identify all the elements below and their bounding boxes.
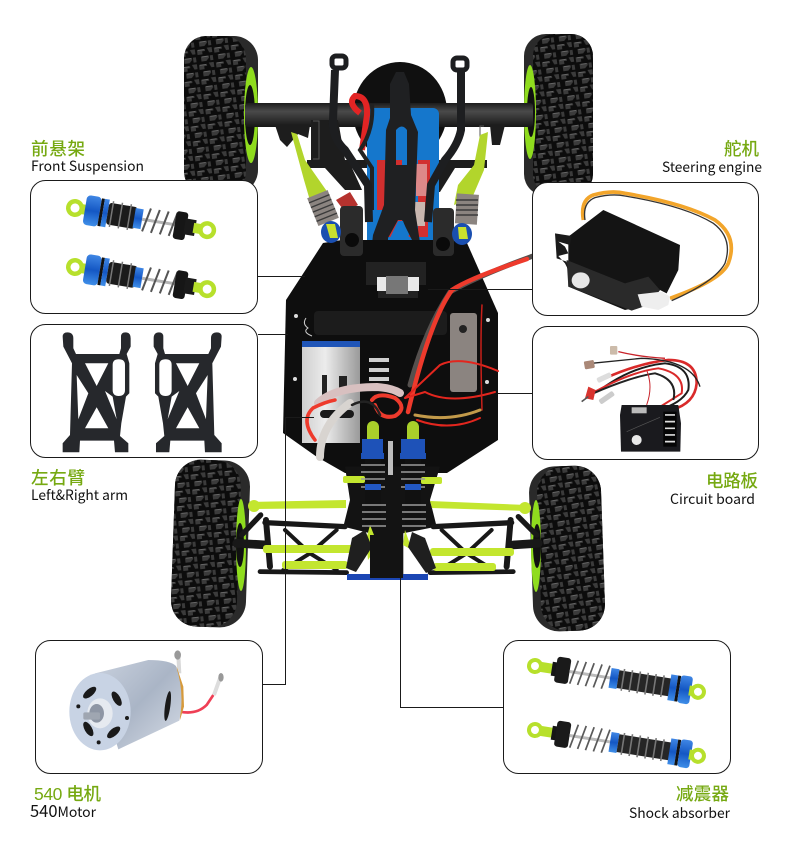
label: 540 motor — [30, 784, 102, 822]
axle brackets — [275, 120, 505, 192]
label: 540 motor: 540Motor — [30, 798, 97, 822]
car chassis photo — [170, 34, 606, 632]
label: left and right arm — [31, 468, 128, 505]
servo — [555, 192, 731, 311]
arm pair — [63, 332, 222, 452]
central brace — [370, 72, 423, 262]
front axle — [245, 103, 533, 127]
label: steering engine: Steering engine — [662, 157, 762, 177]
roll cage — [332, 56, 467, 222]
rear right tyre — [528, 465, 606, 632]
motor — [69, 650, 224, 750]
esc vents — [369, 358, 389, 381]
white clip — [304, 318, 312, 336]
rear blue plate — [347, 574, 428, 580]
front left tyre — [184, 36, 258, 194]
chassis plate — [283, 240, 498, 473]
rear green links — [248, 476, 531, 571]
label: left and right arm: 左右臂 — [31, 468, 85, 488]
red plug — [336, 192, 358, 212]
panel: 540 motor — [36, 640, 262, 774]
rear gearbox mount — [366, 262, 426, 298]
label: front suspension: 前悬架 — [31, 139, 85, 159]
battery wires — [352, 96, 367, 150]
esc with wires — [582, 346, 700, 452]
rear black center and arms — [237, 467, 538, 578]
front dome — [353, 62, 447, 162]
label: front suspension: Front Suspension — [31, 156, 144, 176]
front springs — [307, 190, 479, 245]
rear shocks — [525, 651, 708, 771]
label: 540 motor: 540 电机 — [34, 784, 102, 804]
rear shock left — [361, 421, 386, 526]
battery — [367, 108, 439, 250]
screw holes — [293, 314, 490, 384]
label: circuit board — [670, 471, 758, 509]
panel: circuit board — [532, 326, 758, 460]
panel: shock absorber — [504, 640, 730, 774]
rear knuckles — [346, 530, 436, 573]
label: shock absorber: 减震器 — [676, 784, 730, 804]
leader lines — [258, 276, 532, 708]
panel: left and right arm — [30, 324, 258, 458]
inner brace opening — [389, 221, 411, 250]
red and grey wires — [307, 256, 533, 457]
front green arms — [291, 132, 488, 205]
front right tyre — [524, 34, 593, 196]
front suspension shocks — [64, 192, 219, 305]
label: circuit board: Circuit board — [670, 489, 755, 509]
silver heat plate — [450, 313, 477, 392]
panel: steering engine — [532, 182, 758, 316]
center rod — [388, 441, 393, 475]
label: steering engine: 舵机 — [724, 139, 760, 159]
rear left tyre — [170, 459, 251, 628]
rear shock right — [400, 421, 426, 526]
label: front suspension — [31, 139, 144, 176]
spur gear cover — [314, 311, 447, 335]
panel: front suspension — [30, 180, 258, 314]
knuckles — [340, 206, 454, 256]
label: circuit board: 电路板 — [706, 471, 758, 491]
label: shock absorber: Shock absorber — [629, 803, 731, 823]
label: steering engine — [662, 139, 762, 177]
label: left and right arm: Left&Right arm — [31, 485, 128, 505]
motor in chassis — [302, 341, 360, 443]
label: shock absorber — [629, 784, 731, 823]
